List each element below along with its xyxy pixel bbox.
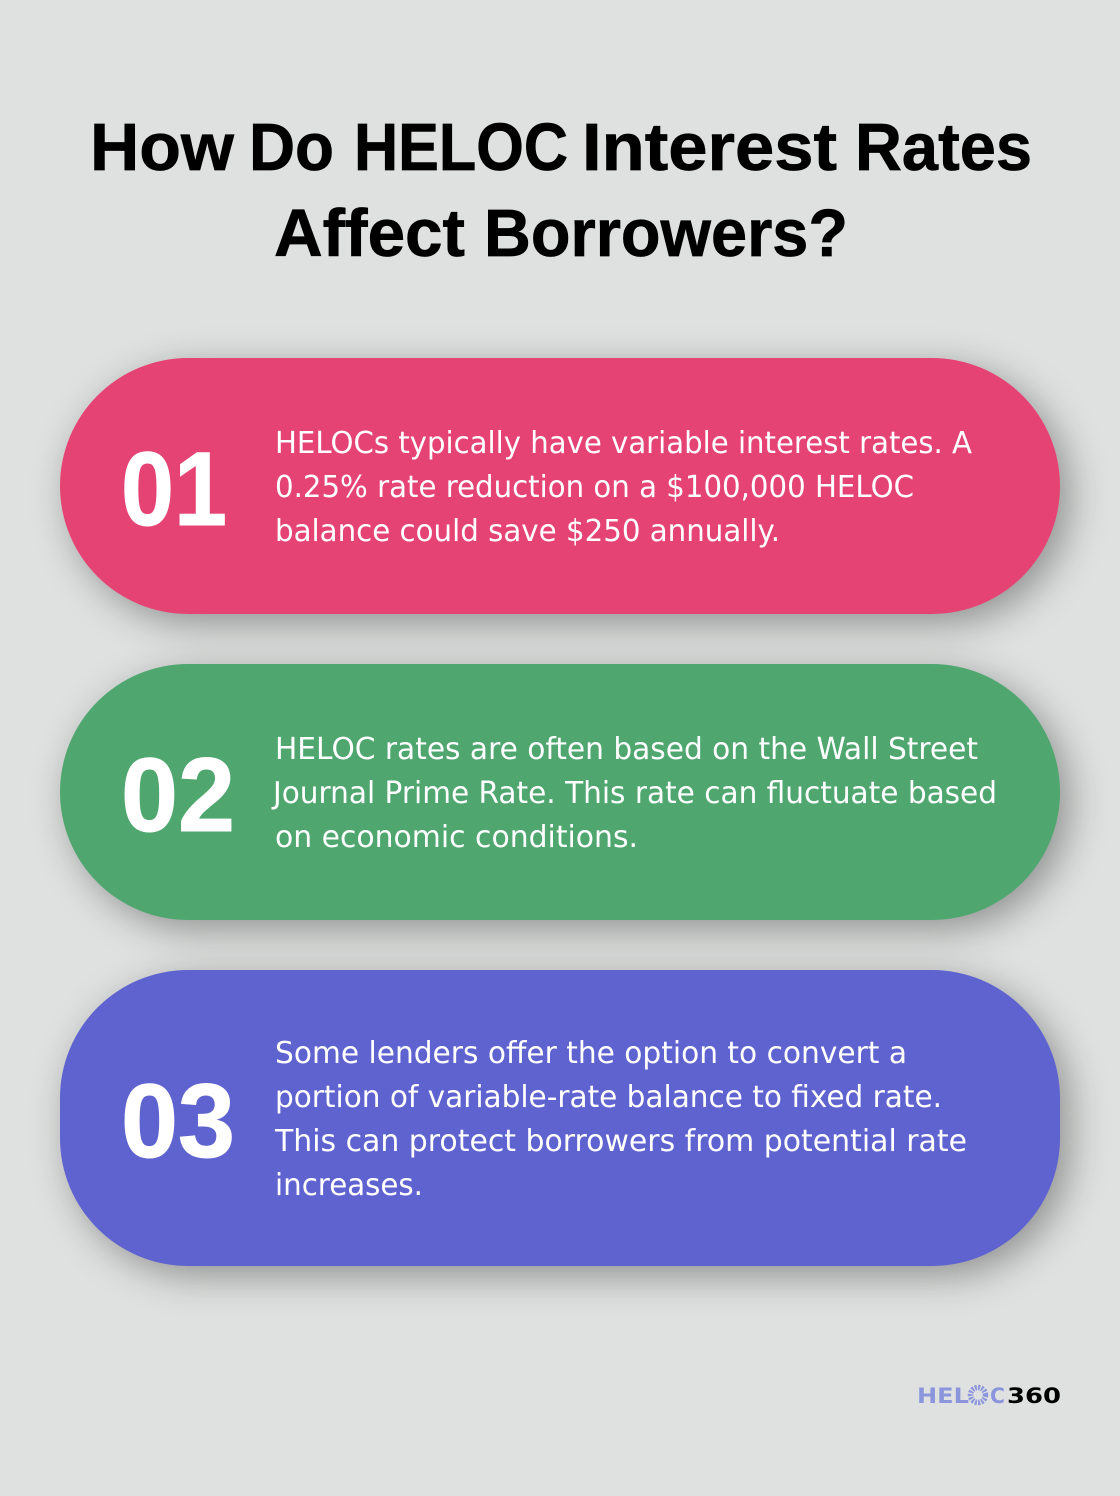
title: HELOC — [354, 110, 568, 185]
panel: card 02 — [60, 664, 1060, 920]
text block 03 — [274, 1036, 967, 1203]
text block 03: increases. — [275, 1168, 423, 1203]
text block 01: HELOCs typically have variable interest rates. A — [275, 426, 972, 461]
text block 02: on economic conditions. — [275, 820, 638, 855]
text block 03: This can protect borrowers from potential rate — [274, 1124, 967, 1159]
title: Rates — [855, 110, 1032, 185]
panel: card 03 — [60, 970, 1060, 1266]
title — [90, 110, 1032, 271]
icon: swirl O — [970, 1388, 986, 1402]
title: Affect — [274, 196, 465, 271]
panel: card 01 — [60, 358, 1060, 614]
text block 03: portion of variable-rate balance to fixed rate. — [275, 1080, 942, 1115]
text block 02: Journal Prime Rate. This rate can fluctuate based — [271, 776, 997, 811]
logo: HELOC360: HEL — [917, 1384, 969, 1408]
text block 02: HELOC rates are often based on the Wall Street — [275, 732, 978, 767]
text block 01 — [275, 426, 972, 549]
text block 02 — [271, 732, 997, 855]
title: Interest — [582, 110, 837, 185]
logo: HELOC360: C — [990, 1384, 1005, 1408]
number 01: 01 — [121, 431, 227, 548]
logo: HELOC360: 360 — [1007, 1384, 1061, 1408]
logo: HELOC360 — [917, 1384, 1061, 1408]
title: How — [90, 110, 235, 185]
number 03: 03 — [121, 1063, 235, 1180]
text block 03: Some lenders offer the option to convert a — [275, 1036, 907, 1071]
text block 01: balance could save $250 annually. — [275, 514, 780, 549]
title: Borrowers? — [484, 196, 848, 271]
title: Do — [249, 110, 334, 185]
text block 01: 0.25% rate reduction on a $100,000 HELOC — [275, 470, 914, 505]
number 02: 02 — [121, 737, 235, 854]
